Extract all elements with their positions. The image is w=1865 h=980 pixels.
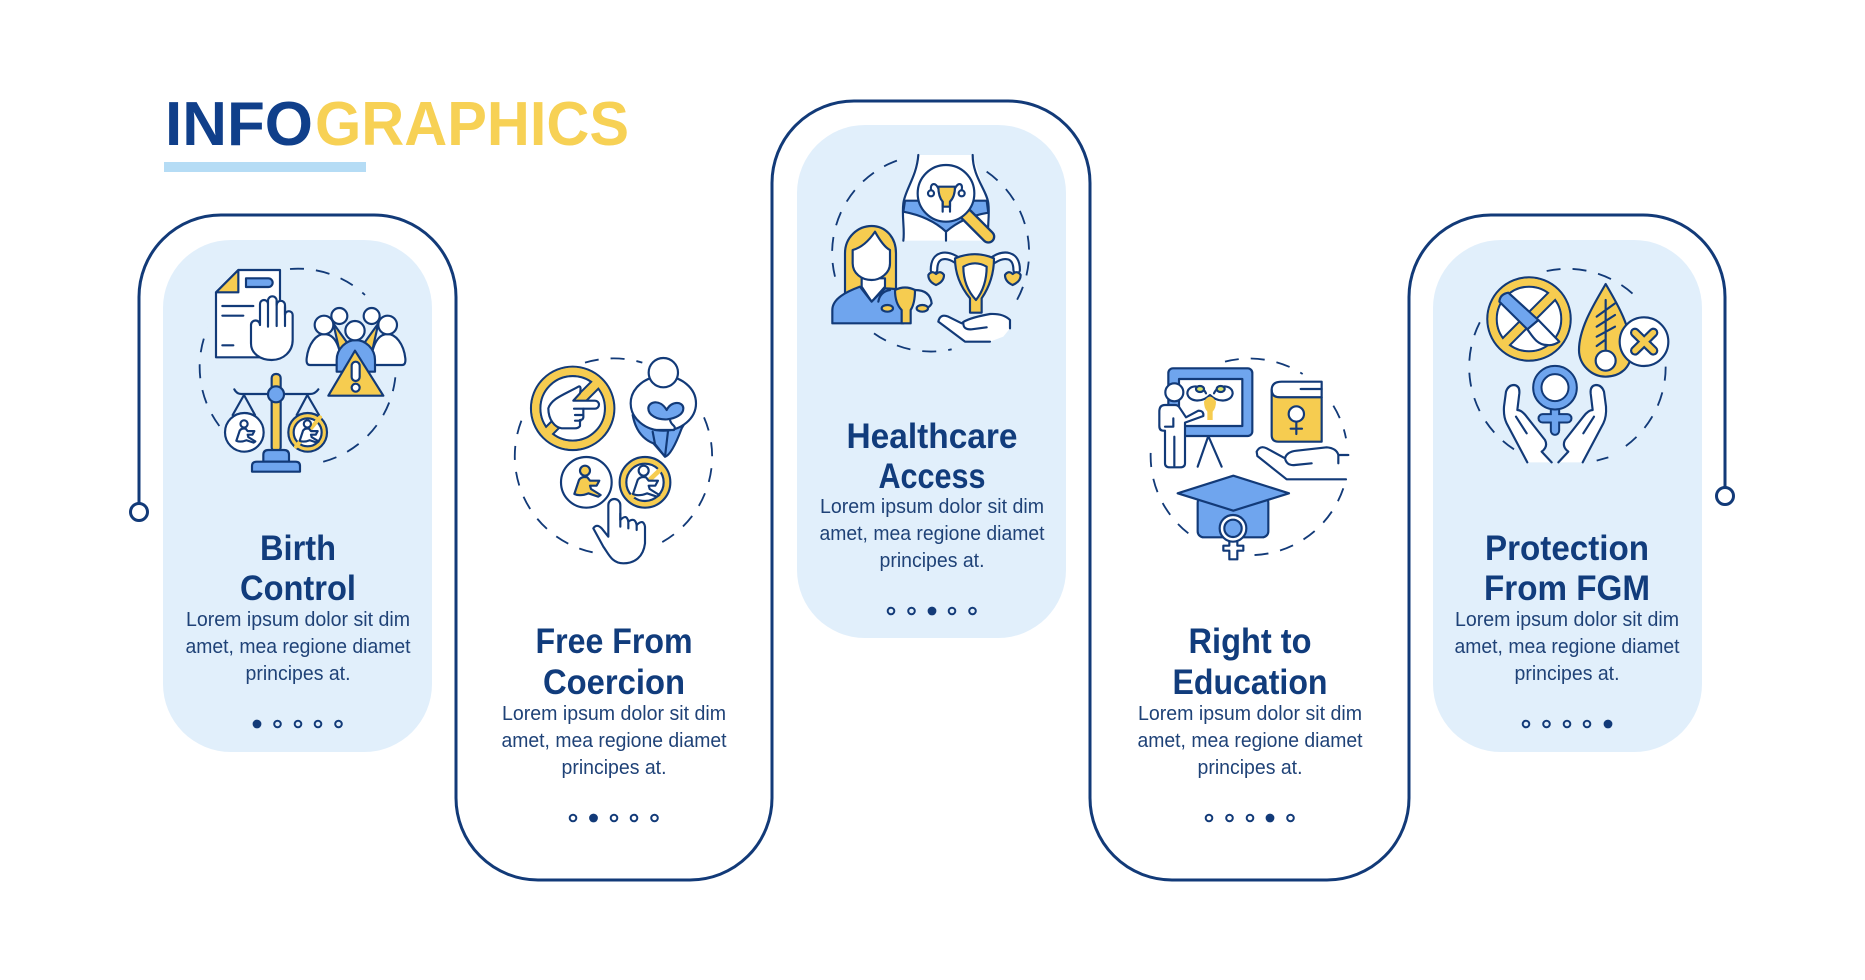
text: protection from FGM description: amet, mea regione diamet (1454, 636, 1680, 658)
text: birth control description: Lorem ipsum dolor sit dim (186, 609, 410, 631)
icon: right to education (1151, 359, 1348, 559)
heading: free from coercion (536, 622, 692, 702)
icon: healthcare access (832, 155, 1029, 352)
panel: right to education (1138, 359, 1363, 822)
text: protection from FGM description (1454, 609, 1680, 685)
heading: free from coercion: Free From (536, 622, 692, 661)
text: right to education description (1138, 703, 1363, 779)
text: healthcare access description: amet, mea regione diamet (820, 523, 1045, 545)
pagination dots: step 5 (1523, 720, 1612, 728)
title (164, 90, 629, 172)
panel background: healthcare access (797, 125, 1066, 638)
heading: protection from FGM: Protection (1485, 529, 1649, 568)
text: protection from FGM description: principes at. (1514, 663, 1620, 685)
heading: right to education (1172, 622, 1328, 702)
heading: right to education: Right to (1188, 622, 1312, 661)
connecting outline (130, 101, 1734, 880)
text: healthcare access description: principes at. (880, 550, 984, 572)
title word: INFO: INFO (165, 90, 313, 159)
text: free from coercion description: principes at. (562, 757, 666, 779)
pagination dots: step 1 (253, 720, 342, 728)
heading: protection from FGM (1484, 529, 1650, 608)
title word: GRAPHICS: GRAPHICS (315, 90, 629, 159)
text: right to education description: amet, mea regione diamet (1138, 730, 1363, 752)
heading: birth control: Birth (260, 529, 336, 568)
panel: healthcare access (820, 155, 1045, 615)
heading: healthcare access (846, 417, 1018, 496)
text: birth control description (186, 609, 411, 685)
text: protection from FGM description: Lorem ipsum dolor sit dim (1455, 609, 1679, 631)
text: free from coercion description: amet, mea regione diamet (502, 730, 727, 752)
heading: birth control: Control (240, 569, 356, 608)
heading: healthcare access: Access (878, 457, 986, 496)
text: healthcare access description: Lorem ipsum dolor sit dim (820, 496, 1044, 518)
pagination dots: step 2 (570, 814, 658, 822)
text: right to education description: Lorem ipsum dolor sit dim (1138, 703, 1362, 725)
heading: free from coercion: Coercion (543, 663, 685, 702)
text: birth control description: principes at. (246, 663, 350, 685)
heading: right to education: Education (1172, 663, 1328, 702)
panel: protection from FGM (1454, 269, 1680, 728)
icon: protection from FGM (1469, 269, 1668, 462)
heading: protection from FGM: From FGM (1484, 569, 1650, 608)
panel: birth control (186, 269, 411, 728)
panel: free from coercion (502, 358, 727, 822)
text: birth control description: amet, mea regione diamet (186, 636, 411, 658)
pagination dots: step 4 (1206, 814, 1294, 822)
panel background: birth control (163, 240, 432, 752)
heading: healthcare access: Healthcare (846, 417, 1018, 456)
text: healthcare access description (820, 496, 1045, 572)
panel background: protection from FGM (1433, 240, 1702, 752)
heading: birth control (240, 529, 356, 608)
icon: free from coercion (515, 358, 712, 563)
text: free from coercion description (502, 703, 727, 779)
icon: birth control (200, 269, 405, 472)
pagination dots: step 3 (888, 607, 976, 615)
text: free from coercion description: Lorem ipsum dolor sit dim (502, 703, 726, 725)
text: right to education description: principes at. (1198, 757, 1302, 779)
title underline (164, 162, 366, 172)
